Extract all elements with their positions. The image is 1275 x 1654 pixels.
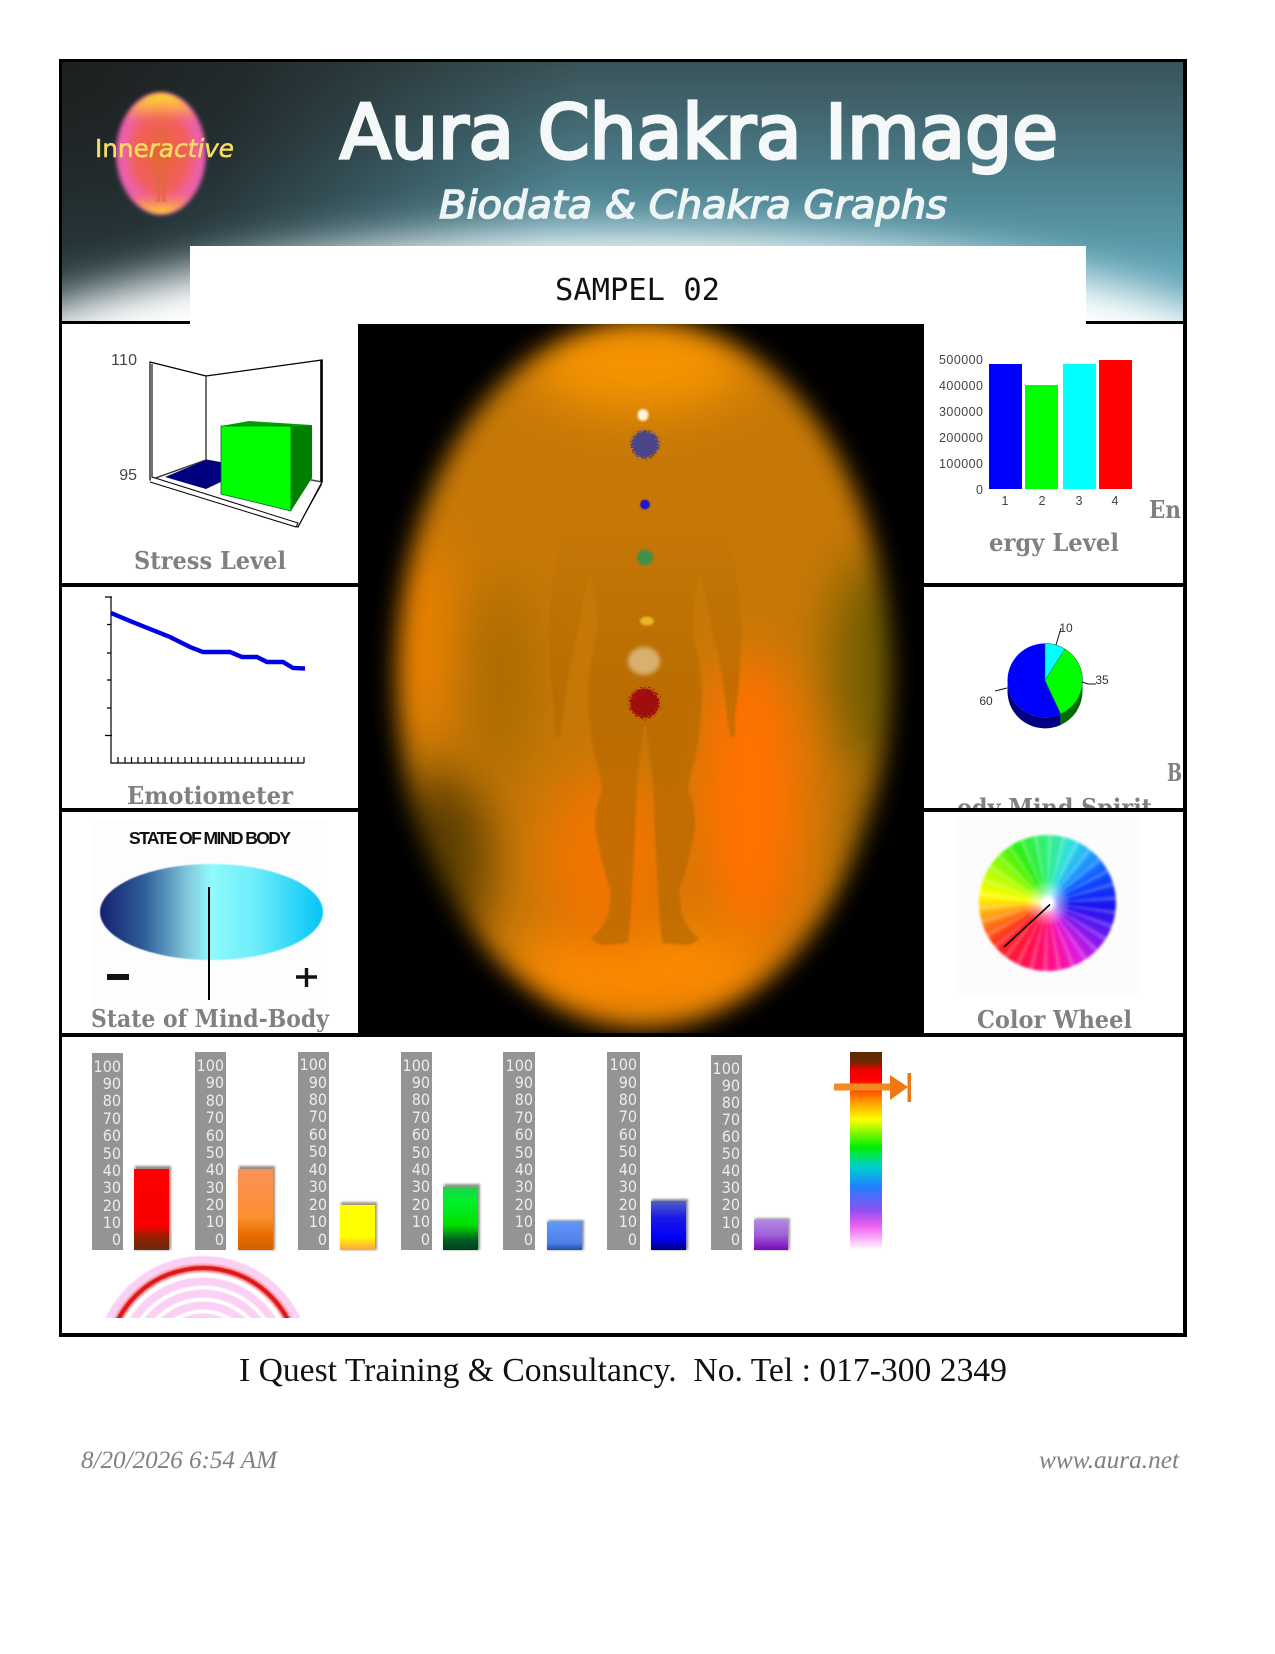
chart: colour spectrum scale with arrow bbox=[834, 1052, 911, 1250]
bar group: green: 90 bbox=[412, 1073, 430, 1092]
chart: energy level bars: 200000 bbox=[939, 431, 983, 445]
bar group: orange: 0 bbox=[215, 1230, 224, 1249]
chart: energy level bars: 1 bbox=[1002, 494, 1009, 508]
frame lines bbox=[59, 59, 1187, 1337]
bar group: dark blue: 70 bbox=[619, 1107, 637, 1126]
bar group: green: 30 bbox=[412, 1177, 430, 1196]
chakra: sacral bbox=[628, 647, 660, 675]
panel: sample name box: SAMPEL 02 bbox=[555, 273, 720, 308]
chart: chakra bars bbox=[92, 1052, 790, 1250]
chart: energy level bars: 300000 bbox=[939, 405, 983, 419]
chart: energy level bars: 100000 bbox=[939, 457, 983, 471]
label: energy level: ergy Level bbox=[989, 528, 1119, 557]
bar group: violet: 30 bbox=[722, 1178, 740, 1197]
bar group: yellow bbox=[298, 1052, 377, 1250]
bar group: violet: 70 bbox=[722, 1110, 740, 1129]
bar group: orange: 40 bbox=[206, 1160, 224, 1179]
bar group: orange: 70 bbox=[206, 1108, 224, 1127]
subtitle: Biodata & Chakra Graphs bbox=[439, 183, 947, 227]
bar group: dark blue: 100 bbox=[610, 1055, 637, 1074]
bar group: red: 80 bbox=[103, 1091, 121, 1110]
chakra: crown bbox=[638, 409, 648, 421]
chart: state of mind body bbox=[92, 820, 328, 1010]
bar group: red: 0 bbox=[112, 1230, 121, 1249]
chakra: throat bbox=[640, 500, 650, 510]
bar group: light blue: 90 bbox=[515, 1073, 533, 1092]
bar group: green bbox=[401, 1052, 480, 1250]
bar group: yellow: 0 bbox=[318, 1230, 327, 1249]
bar group: dark blue: 0 bbox=[628, 1230, 637, 1249]
bar group: red: 30 bbox=[103, 1178, 121, 1197]
chart: body mind spirit pie: 60 bbox=[979, 694, 993, 708]
chart: energy level bars: 2 bbox=[1039, 494, 1046, 508]
icon: color wheel needle bbox=[1004, 904, 1050, 947]
bar group: red: 10 bbox=[103, 1213, 121, 1232]
bar group: dark blue: 10 bbox=[619, 1212, 637, 1231]
bar group: dark blue: 40 bbox=[619, 1160, 637, 1179]
bar group: red bbox=[92, 1053, 171, 1250]
chart: stress level 3D bar bbox=[111, 352, 322, 527]
chart: energy level bars bbox=[939, 353, 1132, 508]
bar group: yellow: 10 bbox=[309, 1212, 327, 1231]
bar group: light blue: 0 bbox=[524, 1230, 533, 1249]
bar group: yellow: 90 bbox=[309, 1073, 327, 1092]
bar group: orange: 20 bbox=[206, 1195, 224, 1214]
chart: energy level bars: 400000 bbox=[939, 379, 983, 393]
page artwork bbox=[59, 59, 1187, 1468]
bar group: green: 50 bbox=[412, 1143, 430, 1162]
bar group: orange: 30 bbox=[206, 1178, 224, 1197]
bar group: green: 70 bbox=[412, 1108, 430, 1127]
bar group: orange: 90 bbox=[206, 1073, 224, 1092]
bar group: yellow: 80 bbox=[309, 1090, 327, 1109]
bar group: yellow: 30 bbox=[309, 1177, 327, 1196]
icon: Inneractive aura logo: Inneractive bbox=[95, 134, 234, 163]
bar group: green: 0 bbox=[421, 1230, 430, 1249]
chart: body mind spirit pie bbox=[979, 621, 1109, 728]
bar group: light blue: 50 bbox=[515, 1143, 533, 1162]
title: Aura Chakra Image bbox=[340, 88, 1058, 176]
bar group: red: 70 bbox=[103, 1109, 121, 1128]
bar group: orange: 10 bbox=[206, 1212, 224, 1231]
bar group: violet: 20 bbox=[722, 1195, 740, 1214]
bar group: red: 60 bbox=[103, 1126, 121, 1145]
bar group: dark blue: 90 bbox=[619, 1073, 637, 1092]
chart: energy level bars: 3 bbox=[1076, 494, 1083, 508]
panel: sample name box bbox=[190, 246, 1086, 324]
bar group: light blue: 100 bbox=[506, 1056, 533, 1075]
label: energy level bbox=[989, 495, 1181, 557]
panel: color wheel image bbox=[957, 816, 1140, 995]
bar group: yellow: 70 bbox=[309, 1107, 327, 1126]
label: emotiometer: Emotiometer bbox=[127, 781, 293, 810]
chakra: third eye bbox=[631, 430, 659, 458]
bar group: violet: 90 bbox=[722, 1076, 740, 1095]
label: color wheel: Color Wheel bbox=[977, 1005, 1132, 1034]
bar group: dark blue: 30 bbox=[619, 1177, 637, 1196]
panel: header banner bbox=[62, 62, 1183, 321]
bar group: dark blue: 80 bbox=[619, 1090, 637, 1109]
bar group: green: 10 bbox=[412, 1212, 430, 1231]
bar group: violet: 50 bbox=[722, 1144, 740, 1163]
bar group: orange: 100 bbox=[197, 1056, 224, 1075]
chart: state of mind body: STATE OF MIND BODY bbox=[129, 828, 291, 848]
bar group: light blue: 40 bbox=[515, 1160, 533, 1179]
icon: color wheel disc bbox=[979, 835, 1116, 971]
label: body mind spirit: B bbox=[1167, 758, 1182, 787]
bar group: green: 100 bbox=[403, 1056, 430, 1075]
chart: energy level bars: 500000 bbox=[939, 353, 983, 367]
bar group: yellow: 20 bbox=[309, 1195, 327, 1214]
website: www.aura.net bbox=[1039, 1447, 1180, 1474]
bar group: violet: 40 bbox=[722, 1161, 740, 1180]
bar group: red: 50 bbox=[103, 1144, 121, 1163]
bar group: green: 20 bbox=[412, 1195, 430, 1214]
bar group: orange: 80 bbox=[206, 1091, 224, 1110]
bar group: red: 20 bbox=[103, 1196, 121, 1215]
chart: energy level bars: 0 bbox=[976, 483, 983, 497]
chakra: heart bbox=[637, 550, 653, 566]
chart: body mind spirit pie: 35 bbox=[1095, 673, 1109, 687]
bar group: light blue bbox=[503, 1052, 584, 1250]
bar group: red: 90 bbox=[103, 1074, 121, 1093]
bar group: red: 100 bbox=[94, 1057, 121, 1076]
chart: stress level 3D bar: 110 bbox=[111, 352, 137, 369]
bar group: violet bbox=[711, 1055, 790, 1250]
bar group: yellow: 40 bbox=[309, 1160, 327, 1179]
chakra: solar plexus bbox=[640, 616, 654, 626]
label: energy level: En bbox=[1149, 495, 1181, 524]
contact line: I Quest Training & Consultancy. No. Tel : 017-300 2349 bbox=[239, 1352, 1007, 1389]
bar group: yellow: 60 bbox=[309, 1125, 327, 1144]
bar group: violet: 80 bbox=[722, 1093, 740, 1112]
bar group: light blue: 10 bbox=[515, 1212, 533, 1231]
bar group: violet: 10 bbox=[722, 1213, 740, 1232]
bar group: green: 80 bbox=[412, 1090, 430, 1109]
bar group: orange: 60 bbox=[206, 1126, 224, 1145]
date stamp: 8/20/2026 6:54 AM bbox=[81, 1447, 278, 1474]
bar group: light blue: 80 bbox=[515, 1090, 533, 1109]
bar group: light blue: 30 bbox=[515, 1177, 533, 1196]
chakra: root bbox=[630, 688, 660, 718]
chart: emotiometer line bbox=[105, 597, 305, 763]
bar group: green: 40 bbox=[412, 1160, 430, 1179]
label: state of mind-body: State of Mind-Body bbox=[91, 1004, 330, 1033]
bar group: violet: 0 bbox=[731, 1230, 740, 1249]
bar group: orange: 50 bbox=[206, 1143, 224, 1162]
label: body mind spirit: ody Mind Spirit bbox=[957, 793, 1152, 822]
bar group: dark blue: 50 bbox=[619, 1142, 637, 1161]
bar group: dark blue: 20 bbox=[619, 1195, 637, 1214]
bar group: light blue: 20 bbox=[515, 1195, 533, 1214]
bar group: orange bbox=[195, 1052, 275, 1250]
panel: aura body image bbox=[358, 320, 924, 1034]
bar group: dark blue: 60 bbox=[619, 1125, 637, 1144]
chart: energy level bars: 4 bbox=[1112, 494, 1119, 508]
bar group: light blue: 60 bbox=[515, 1125, 533, 1144]
bar group: red: 40 bbox=[103, 1161, 121, 1180]
chart: pink and red arcs bbox=[105, 1256, 301, 1318]
chart: body mind spirit pie: 10 bbox=[1059, 621, 1073, 635]
icon: Inneractive aura logo bbox=[95, 92, 234, 214]
bar group: yellow: 100 bbox=[300, 1055, 327, 1074]
bar group: violet: 100 bbox=[713, 1059, 740, 1078]
bar group: dark blue bbox=[607, 1052, 688, 1250]
bar group: violet: 60 bbox=[722, 1127, 740, 1146]
bar group: yellow: 50 bbox=[309, 1142, 327, 1161]
label: body mind spirit bbox=[958, 763, 1181, 808]
bar group: light blue: 70 bbox=[515, 1108, 533, 1127]
label: stress level: Stress Level bbox=[134, 546, 286, 575]
bar group: green: 60 bbox=[412, 1125, 430, 1144]
silhouette: human body bbox=[552, 612, 741, 946]
chart: stress level 3D bar: 95 bbox=[119, 467, 137, 484]
